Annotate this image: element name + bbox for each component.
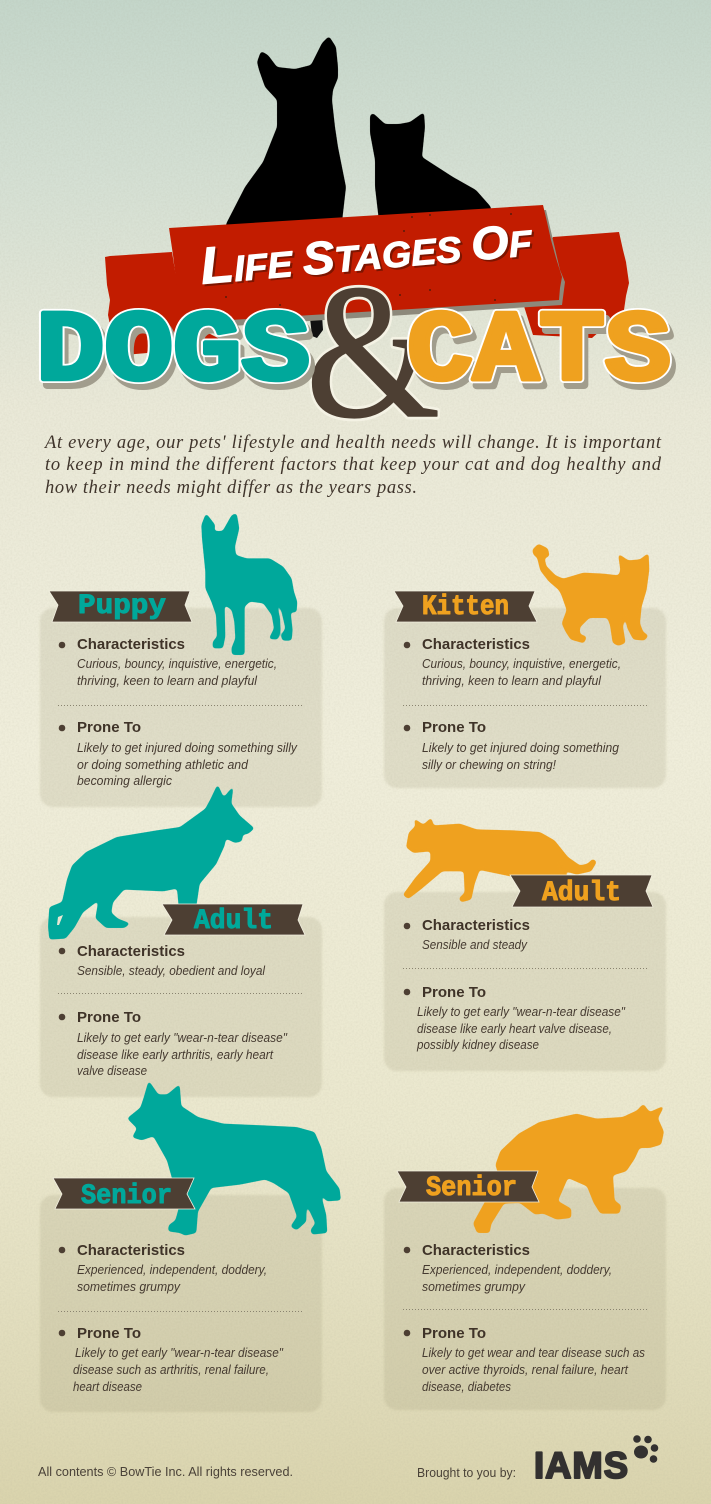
ribbon: Senior: [53, 1178, 195, 1212]
prone to: [404, 719, 620, 772]
prone to: Prone To: [422, 984, 486, 1001]
prone to: disease like early heart valve disease,: [417, 1021, 612, 1036]
prone to: heart disease: [73, 1379, 142, 1394]
back red banner, left piece: [105, 252, 218, 356]
characteristics: thriving, keen to learn and playful: [422, 673, 602, 688]
prone to: Likely to get injured doing something: [422, 740, 620, 755]
panel: kitten: [384, 544, 666, 788]
characteristics: sometimes grumpy: [422, 1279, 526, 1294]
characteristics: Experienced, independent, doddery,: [77, 1262, 267, 1277]
ribbon: Puppy: [49, 591, 192, 622]
puppy card: [40, 608, 322, 807]
intro paragraph: At every age, our pets' lifestyle and health needs will change. It is important: [43, 433, 662, 453]
prone to: [404, 1325, 645, 1394]
panel: puppy: [40, 513, 322, 807]
footer copyright: All contents © BowTie Inc. All rights reserved.: [38, 1464, 293, 1479]
footer sponsor label: Brought to you by:: [417, 1465, 516, 1480]
prone to: Prone To: [77, 1009, 141, 1026]
characteristics: Curious, bouncy, inquistive, energetic,: [77, 656, 277, 671]
prone to: becoming allergic: [77, 773, 172, 788]
title: ampersand: &: [306, 245, 440, 458]
ribbon: Senior: Senior: [426, 1173, 517, 1204]
dog paws: [310, 315, 323, 338]
title: ampersand: &: [306, 245, 440, 458]
prone to: disease like early arthritis, early heart: [77, 1047, 274, 1062]
panel: senior cat: [384, 1104, 666, 1410]
icon: cat silhouette: [370, 112, 491, 230]
banner specks: [225, 213, 512, 306]
characteristics: [59, 636, 277, 688]
characteristics: thriving, keen to learn and playful: [77, 673, 258, 688]
prone to: disease, diabetes: [422, 1379, 511, 1394]
title: Life Stages Of: LIFE STAGES OF: [200, 211, 537, 298]
characteristics: Characteristics: [422, 917, 530, 934]
prone to: Prone To: [422, 719, 486, 736]
panel: adult dog: [40, 784, 322, 1097]
icon: dog silhouette: [226, 36, 346, 240]
characteristics: [59, 943, 266, 978]
adult cat card: [384, 892, 666, 1071]
characteristics: [404, 917, 530, 952]
intro paragraph: [43, 433, 662, 498]
logo: IAMS: [534, 1435, 658, 1486]
characteristics: [404, 636, 621, 688]
intro paragraph: to keep in mind the different factors that keep your cat and dog healthy and: [45, 455, 662, 475]
title: DOGS: DOGS: [36, 297, 310, 410]
characteristics: sometimes grumpy: [77, 1279, 181, 1294]
panel: senior dog: [40, 1080, 341, 1412]
ribbon: Adult: [510, 875, 653, 909]
prone to: Likely to get injured doing something silly: [77, 740, 298, 755]
characteristics: Characteristics: [422, 1242, 530, 1259]
prone to: [404, 984, 626, 1052]
icon: puppy silhouette: [201, 513, 297, 655]
kitten card: [384, 608, 666, 788]
characteristics: Characteristics: [77, 943, 185, 960]
prone to: valve disease: [77, 1063, 147, 1078]
prone to: [59, 719, 298, 788]
ribbon: Kitten: Kitten: [422, 592, 509, 623]
main red banner: [169, 205, 562, 323]
senior dog card: [40, 1195, 322, 1412]
icon: adult cat silhouette: [403, 817, 597, 902]
title: DOGS: DOGS: [36, 297, 310, 410]
prone to: Prone To: [422, 1325, 486, 1342]
prone to: Prone To: [77, 1325, 141, 1342]
characteristics: Characteristics: [77, 636, 185, 653]
prone to: Likely to get wear and tear disease such as: [422, 1345, 645, 1360]
prone to: Likely to get early "wear-n-tear disease": [75, 1345, 284, 1360]
ribbon: Adult: Adult: [194, 906, 273, 937]
prone to: Likely to get early "wear-n-tear disease": [77, 1030, 288, 1045]
back red banner, right piece: [523, 232, 629, 338]
panel: adult cat: [384, 817, 666, 1071]
ribbon: Senior: [397, 1171, 539, 1204]
ribbon: Adult: Adult: [542, 878, 621, 909]
prone to: possibly kidney disease: [416, 1037, 539, 1052]
intro paragraph: how their needs might differ as the years pass.: [45, 478, 417, 498]
prone to: Prone To: [77, 719, 141, 736]
characteristics: Sensible, steady, obedient and loyal: [77, 963, 266, 978]
prone to: or doing something athletic and: [77, 757, 249, 772]
title: DOGS: DOGS: [40, 303, 314, 416]
ribbon: Puppy: Puppy: [78, 591, 166, 622]
prone to: [59, 1009, 288, 1078]
title: CATS: CATS: [407, 297, 671, 410]
characteristics: Characteristics: [422, 636, 530, 653]
header illustration: [36, 36, 675, 458]
characteristics: [404, 1242, 612, 1294]
prone to: Likely to get early "wear-n-tear disease": [417, 1004, 626, 1019]
characteristics: Characteristics: [77, 1242, 185, 1259]
senior cat card: [384, 1188, 666, 1410]
ribbon: Kitten: [394, 591, 537, 623]
icon: senior cat silhouette: [473, 1104, 665, 1233]
icon: senior dog silhouette: [127, 1080, 341, 1236]
prone to: over active thyroids, renal failure, heart: [422, 1362, 629, 1377]
icon: kitten silhouette: [532, 544, 649, 646]
logo: IAMS: IAMS: [534, 1445, 629, 1486]
characteristics: [59, 1242, 267, 1294]
ribbon: Adult: [162, 904, 305, 937]
characteristics: Curious, bouncy, inquistive, energetic,: [422, 656, 621, 671]
main banner shadow: [172, 210, 565, 329]
title: CATS: CATS: [407, 297, 671, 410]
icon: adult dog silhouette: [48, 784, 255, 940]
prone to: [59, 1325, 284, 1394]
prone to: disease such as arthritis, renal failure,: [73, 1362, 269, 1377]
prone to: silly or chewing on string!: [422, 757, 556, 772]
adult dog card: [40, 917, 322, 1097]
ribbon: Senior: Senior: [81, 1181, 172, 1212]
title: Life Stages Of: LIFE STAGES OF: [198, 209, 535, 296]
icon: paw: [633, 1435, 658, 1463]
characteristics: Experienced, independent, doddery,: [422, 1262, 612, 1277]
title: CATS: CATS: [411, 303, 675, 416]
characteristics: Sensible and steady: [422, 937, 528, 952]
